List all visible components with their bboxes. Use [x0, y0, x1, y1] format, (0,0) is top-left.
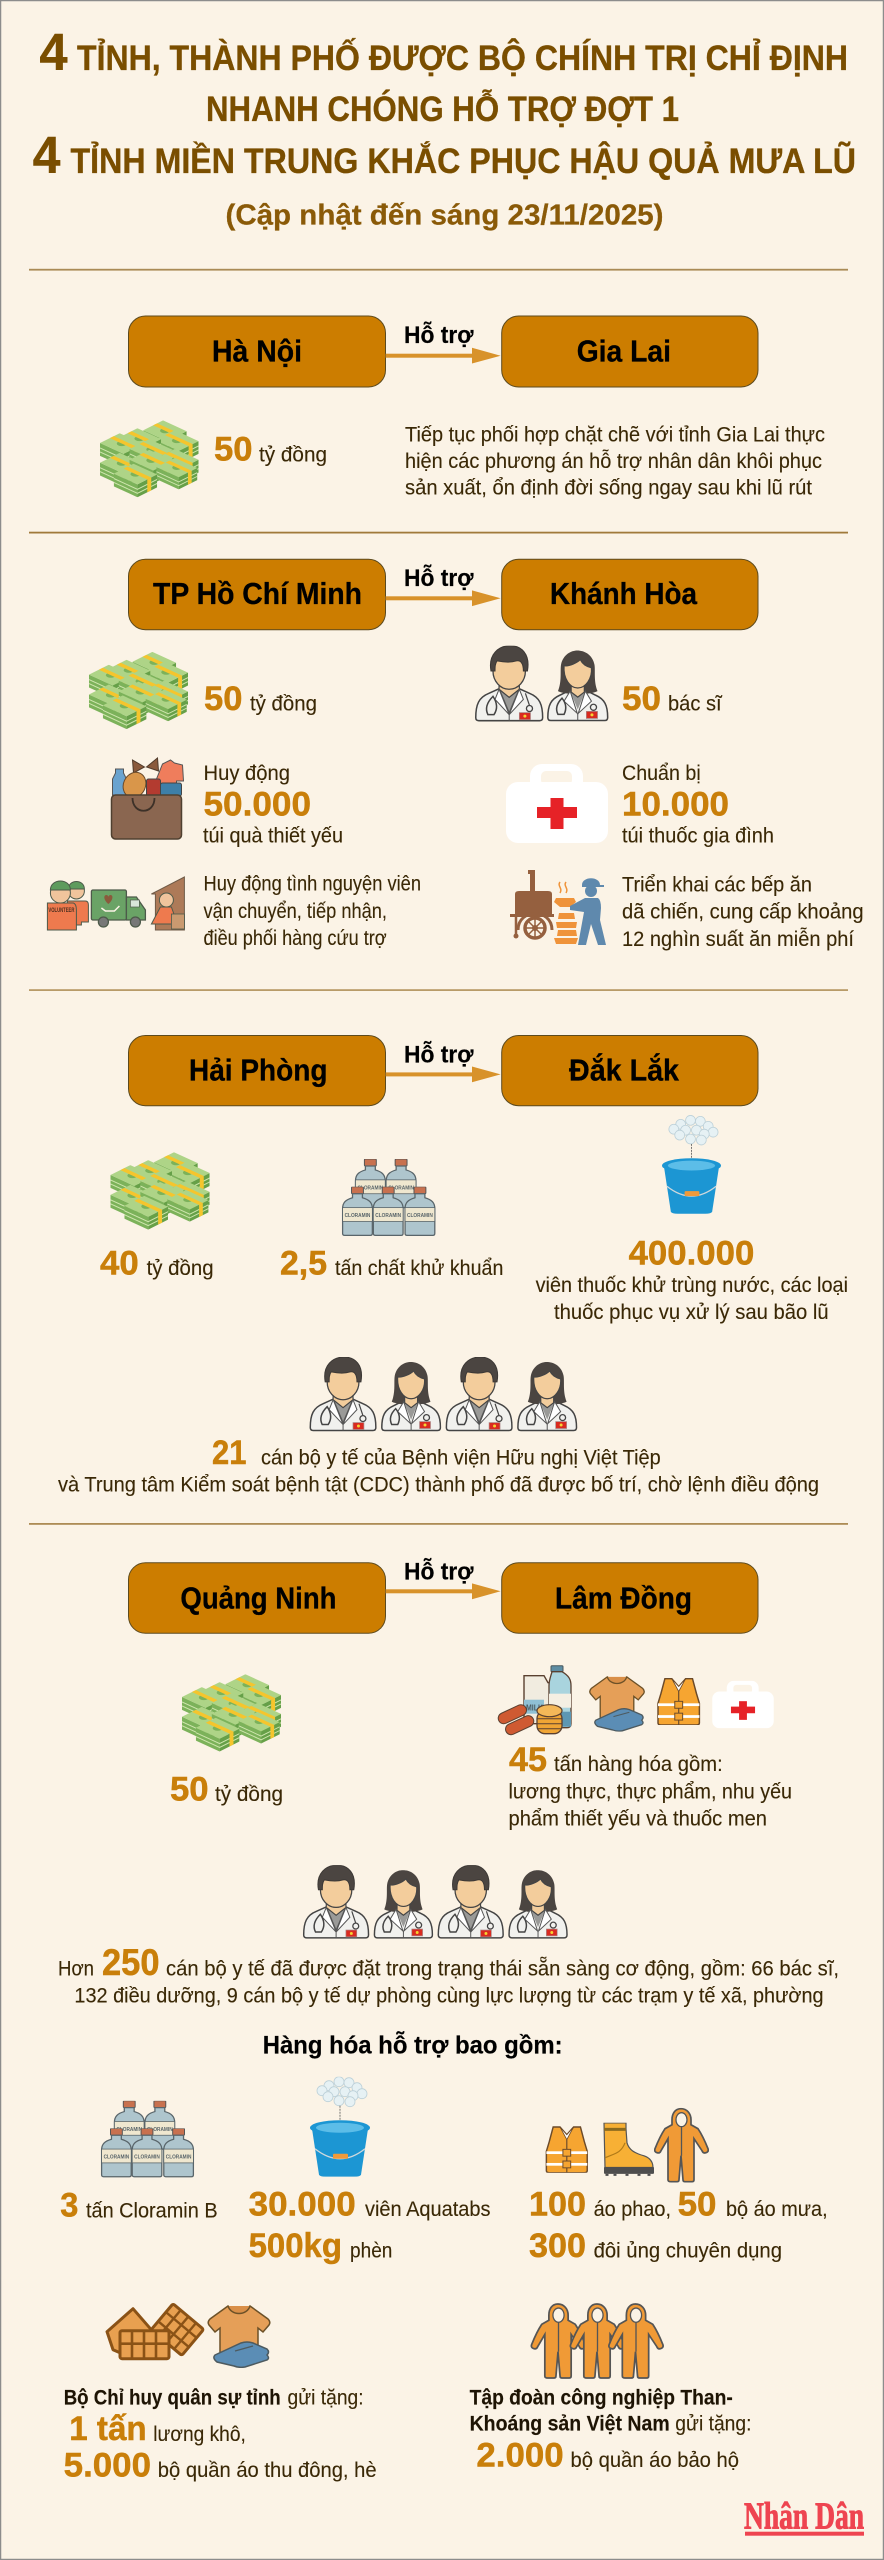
stat: 30.000 viên Aquatabs, 500kg phèn: 30.000	[249, 2186, 356, 2224]
text block: Tập đoàn công nghiệp	[470, 2385, 752, 2475]
stat: Chuẩn bị 10.000 túi thuốc gia đình: Chuẩn bị	[622, 761, 701, 785]
text block: bếp ăn dã chiến	[622, 873, 864, 951]
text block: Tập đoàn công nghiệp: Khoáng sản Việt Nam	[470, 2412, 670, 2436]
icon: gift bag	[112, 758, 184, 839]
box: TP Hồ Chí Minh	[128, 559, 386, 630]
stat: 3 tấn Cloramin B: 3	[60, 2187, 78, 2225]
stat: 30.000 viên Aquatabs, 500kg phèn	[249, 2186, 490, 2265]
icon: rain boot	[604, 2123, 654, 2176]
stat: 45 tấn hàng hóa: phẩm thiết yếu và thuốc men	[508, 1807, 767, 1831]
stat: áo phao, áo mưa, đôi ủng: 50	[678, 2186, 716, 2224]
stat: 50 tỷ đồng: 50	[204, 680, 242, 718]
text block: Bộ Chỉ huy quân sự tỉnh: gửi tặng:	[288, 2385, 364, 2409]
text block: Tập đoàn công nghiệp: 2.000	[476, 2437, 564, 2475]
stat: hơn 250 cán bộ y tế: Hơn	[58, 1956, 94, 1980]
arrow	[386, 348, 501, 364]
icon: dry rations	[107, 2304, 204, 2359]
stat: 50 bác sĩ	[622, 680, 723, 718]
icon: volunteers and truck	[47, 877, 184, 930]
stat: 21 cán bộ y tế: cán bộ y tế của Bệnh viện Hữu nghị Việt Tiệp	[261, 1446, 661, 1470]
stat: 40 tỷ đồng: 40	[100, 1244, 139, 1282]
box: Gia Lai: Gia Lai	[577, 334, 671, 369]
stat: 50 tỷ đồng	[170, 1771, 283, 1809]
stat: 400.000 viên thuốc	[536, 1234, 848, 1324]
stat: 30.000 viên Aquatabs, 500kg phèn: 500kg	[249, 2227, 342, 2265]
stat: áo phao, áo mưa, đôi ủng: đôi ủng chuyên dụng	[594, 2238, 782, 2262]
stat: 3 tấn Cloramin B	[60, 2187, 218, 2225]
icon: medical staff	[310, 1357, 577, 1431]
icon: medical kit	[712, 1681, 774, 1728]
text block: Bộ Chỉ huy quân sự tỉnh	[64, 2385, 377, 2485]
icon: money	[100, 420, 198, 497]
stat: Chuẩn bị 10.000 túi thuốc gia đình: 10.000	[622, 786, 729, 824]
icon: money	[89, 652, 188, 729]
panel: TP Hồ Chí Minh hỗ trợ Khánh Hòa	[47, 559, 864, 951]
icon: cloramin bottles	[343, 1159, 435, 1235]
stat: Huy động 50.000 túi quà thiết yếu: 50.000	[204, 786, 311, 824]
label: Hỗ trợ: Hỗ trợ	[404, 1040, 474, 1068]
box: Đắk Lắk: Đắk Lắk	[569, 1052, 680, 1088]
arrow	[386, 1583, 501, 1599]
text block: tình nguyện viên	[204, 872, 421, 950]
icon: clothes	[590, 1677, 644, 1731]
stat: 2,5 tấn chất khử khuẩn: tấn chất khử khuẩn	[335, 1256, 503, 1280]
stat: 400.000 viên thuốc: viên thuốc khử trùng nước, các loại	[536, 1273, 848, 1297]
box: Hà Nội	[128, 316, 386, 387]
stat: 21 cán bộ y tế: và Trung tâm Kiểm soát bệnh tật (CDC) thành phố đã được bố trí, chờ lệnh điều động	[58, 1473, 819, 1497]
stat: 45 tấn hàng hóa: 45	[509, 1741, 547, 1779]
text block: tình nguyện viên: điều phối hàng cứu trợ	[204, 926, 387, 950]
stat: Chuẩn bị 10.000 túi thuốc gia đình	[622, 761, 774, 848]
stat: 40 tỷ đồng	[100, 1244, 214, 1282]
text block: Tập đoàn công nghiệp: Tập đoàn công nghiệp Than-	[470, 2385, 733, 2409]
box: Gia Lai	[502, 316, 758, 387]
stat: 45 tấn hàng hóa: lương thực, thực phẩm, nhu yếu	[508, 1780, 792, 1804]
text block: bếp ăn dã chiến: dã chiến, cung cấp khoảng	[622, 900, 864, 924]
icon: doctors	[476, 646, 608, 721]
update date subtitle: (Cập nhật đến sáng 23/11/2025)	[226, 200, 664, 232]
title	[33, 24, 856, 185]
stat: hơn 250 cán bộ y tế	[58, 1942, 839, 2008]
stat: 30.000 viên Aquatabs, 500kg phèn: phèn	[350, 2238, 392, 2262]
arrow	[386, 590, 501, 606]
heading: hàng hóa hỗ trợ: Hàng hóa hỗ trợ bao gồm:	[263, 2029, 563, 2059]
stat: 45 tấn hàng hóa	[508, 1741, 792, 1831]
text block: tình nguyện viên: vận chuyển, tiếp nhận,	[204, 899, 387, 923]
icon: tablets and bucket	[662, 1115, 721, 1214]
text block: phối hợp: hiện các phương án hỗ trợ nhân dân khôi phục	[405, 448, 822, 473]
stat: 50 tỷ đồng: tỷ đồng	[250, 691, 317, 715]
icon: food: MILK	[526, 1704, 543, 1713]
box: Lâm Đồng	[502, 1563, 758, 1633]
box: Quảng Ninh: Quảng Ninh	[180, 1580, 336, 1615]
icon: clothes	[208, 2306, 270, 2367]
stat: 40 tỷ đồng: tỷ đồng	[147, 1256, 214, 1280]
stat: hơn 250 cán bộ y tế: 132 điều dưỡng, 9 cán bộ y tế dự phòng cùng lực lượng từ các trạm y tế xã, phường	[74, 1984, 824, 2008]
stat: áo phao, áo mưa, đôi ủng: 300	[529, 2227, 586, 2265]
title: 4	[40, 24, 68, 82]
icon: tablets and bucket	[310, 2077, 370, 2177]
text block: phối hợp: sản xuất, ổn định đời sống ngay sau khi lũ rút	[405, 476, 812, 500]
text block: Bộ Chỉ huy quân sự tỉnh: bộ quần áo thu đông, hè	[158, 2458, 377, 2482]
stat: 2,5 tấn chất khử khuẩn: 2,5	[280, 1244, 327, 1282]
icon: money	[182, 1674, 281, 1751]
stat: 50 tỷ đồng: 50	[170, 1771, 209, 1809]
stat: 400.000 viên thuốc: thuốc phục vụ xử lý sau bão lũ	[554, 1300, 829, 1324]
stat: 50 tỷ đồng: tỷ đồng	[259, 442, 327, 466]
stat: 3 tấn Cloramin B: tấn Cloramin B	[86, 2198, 218, 2222]
text block: Bộ Chỉ huy quân sự tỉnh: 1 tấn	[69, 2410, 147, 2448]
text block: bếp ăn dã chiến: Triển khai các bếp ăn	[622, 873, 812, 897]
icon: life vest	[658, 1679, 699, 1725]
stat: áo phao, áo mưa, đôi ủng: áo phao,	[594, 2197, 671, 2221]
icon: food	[496, 1666, 571, 1737]
stat: 2,5 tấn chất khử khuẩn	[280, 1244, 503, 1282]
text block: Bộ Chỉ huy quân sự tỉnh: Bộ Chỉ huy quân sự tỉnh	[64, 2385, 281, 2409]
panel: Quảng Ninh hỗ trợ Lâm Đồng	[58, 1557, 839, 2485]
stat: Huy động 50.000 túi quà thiết yếu	[203, 761, 343, 848]
text block: phối hợp: Tiếp tục phối hợp chặt chẽ với tỉnh Gia Lai thực	[405, 422, 825, 446]
box: TP Hồ Chí Minh: TP Hồ Chí Minh	[153, 576, 362, 611]
stat: 30.000 viên Aquatabs, 500kg phèn: viên Aquatabs	[365, 2197, 490, 2221]
icon: protective suits	[531, 2304, 663, 2378]
text block: tình nguyện viên: Huy động tình nguyện viên	[204, 872, 421, 896]
stat: hơn 250 cán bộ y tế: 250	[102, 1942, 160, 1983]
stat: 50 tỷ đồng	[214, 431, 327, 469]
box: Khánh Hòa: Khánh Hòa	[550, 576, 698, 611]
icon: protective suit	[655, 2109, 708, 2182]
text block: Bộ Chỉ huy quân sự tỉnh: lương khô,	[153, 2422, 246, 2446]
box: Hải Phòng: Hải Phòng	[189, 1053, 328, 1088]
arrow	[386, 1066, 501, 1082]
stat: Huy động 50.000 túi quà thiết yếu: túi quà thiết yếu	[203, 824, 343, 848]
text block: Bộ Chỉ huy quân sự tỉnh: 5.000	[64, 2447, 151, 2485]
text block: bếp ăn dã chiến: 12 nghìn suất ăn miễn phí	[622, 926, 854, 951]
stat: áo phao, áo mưa, đôi ủng: 100	[529, 2186, 586, 2224]
stat: áo phao, áo mưa, đôi ủng	[529, 2186, 828, 2265]
stat: áo phao, áo mưa, đôi ủng: bộ áo mưa,	[726, 2197, 828, 2221]
icon: medical staff	[304, 1865, 567, 1938]
stat: 50 bác sĩ: 50	[622, 680, 661, 718]
text block: Tập đoàn công nghiệp: gửi tặng:	[675, 2412, 752, 2436]
panel: Hà Nội hỗ trợ Gia Lai	[100, 316, 825, 500]
text block: Tập đoàn công nghiệp: bộ quần áo bảo hộ	[570, 2448, 739, 2472]
stat: 45 tấn hàng hóa: tấn hàng hóa gồm:	[554, 1752, 723, 1776]
stat: 50 tỷ đồng	[204, 680, 317, 718]
stat: hơn 250 cán bộ y tế: cán bộ y tế đã được đặt trong trạng thái sẵn sàng cơ động, gồm: 66 bác sĩ,	[166, 1955, 839, 1981]
stat: 50 tỷ đồng: 50	[214, 431, 252, 469]
box: Quảng Ninh	[128, 1563, 386, 1633]
box: Lâm Đồng: Lâm Đồng	[555, 1580, 692, 1615]
stat: Huy động 50.000 túi quà thiết yếu: Huy động	[204, 761, 290, 785]
icon: field kitchen	[510, 870, 606, 945]
icon: volunteers and truck: VOLUNTEER	[48, 908, 75, 914]
title: NHANH CHÓNG HỖ TRỢ ĐỢT 1	[206, 89, 679, 129]
stat: 50 bác sĩ: bác sĩ	[668, 691, 723, 715]
icon: money	[110, 1152, 210, 1230]
stat: 50 tỷ đồng: tỷ đồng	[215, 1782, 283, 1806]
box: Hải Phòng	[128, 1036, 386, 1106]
panel: Hải Phòng hỗ trợ Đắk Lắk	[58, 1036, 848, 1497]
box: Hà Nội: Hà Nội	[212, 334, 302, 369]
box: Khánh Hòa	[502, 559, 758, 630]
box: Đắk Lắk	[502, 1036, 758, 1106]
title: 4	[33, 127, 60, 185]
stat: 21 cán bộ y tế	[58, 1434, 819, 1497]
text block: phối hợp	[405, 422, 825, 500]
label: Hỗ trợ: Hỗ trợ	[404, 564, 474, 592]
label: Hỗ trợ: Hỗ trợ	[404, 321, 474, 349]
stat: Chuẩn bị 10.000 túi thuốc gia đình: túi thuốc gia đình	[622, 824, 774, 848]
label: Hỗ trợ: Hỗ trợ	[404, 1557, 474, 1585]
icon: cloramin bottles	[102, 2101, 193, 2177]
stat: 21 cán bộ y tế: 21	[212, 1434, 246, 1472]
stat: 400.000 viên thuốc: 400.000	[629, 1234, 754, 1272]
icon: medical kit	[506, 764, 608, 843]
icon: life vest	[546, 2127, 587, 2173]
